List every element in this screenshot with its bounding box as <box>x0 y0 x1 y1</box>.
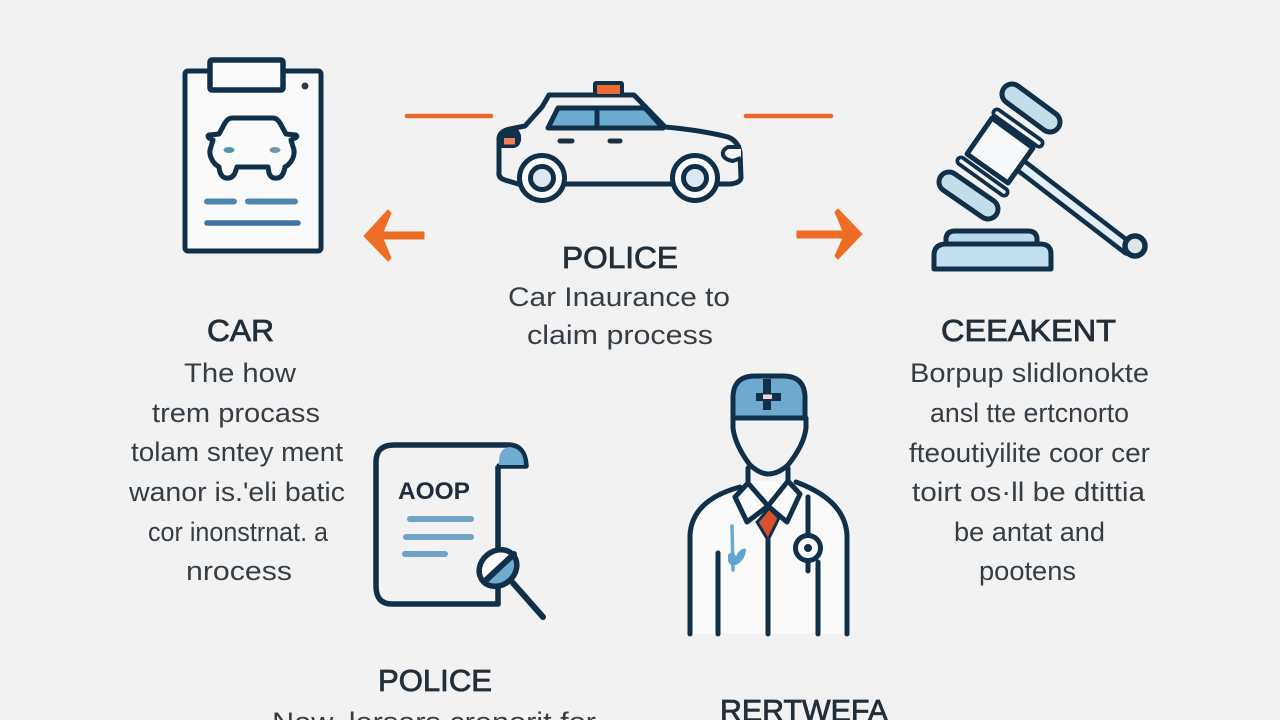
text block: ceeakent <box>909 358 1150 586</box>
text block: car: The how <box>184 358 297 388</box>
icon: police car <box>499 81 741 200</box>
face <box>733 418 806 474</box>
text block: car: wanor is.'eli batic <box>128 477 345 507</box>
text block: ceeakent: ansl tte ertcnorto <box>930 398 1129 428</box>
arrow: top-left dash <box>407 114 491 118</box>
barrel <box>967 118 1033 183</box>
magnifier <box>472 542 524 594</box>
heading: police bottom: POLICE <box>378 663 492 698</box>
collars <box>961 113 1039 192</box>
text block: police centre: claim process <box>527 320 713 350</box>
icon: doctor with stethoscope <box>690 376 847 634</box>
windows <box>548 108 663 128</box>
icon: clipboard with car <box>185 60 321 251</box>
text block: ceeakent: pootens <box>979 556 1076 586</box>
car body <box>499 95 741 184</box>
arrow: top-right dash <box>746 114 831 118</box>
arrow: pointing right <box>797 209 862 259</box>
document lines <box>405 519 471 554</box>
heading: police centre: POLICE <box>562 240 678 275</box>
text block: car: trem procass <box>152 398 320 428</box>
heading: ceeakent: CEEAKENT <box>941 313 1116 348</box>
rear wheel <box>520 156 564 200</box>
sound block <box>946 231 1037 244</box>
icon: judge gavel <box>934 94 1145 269</box>
collar <box>735 481 800 522</box>
top cap <box>1012 94 1050 122</box>
text block: car: cor inonstrnat. a <box>148 517 329 547</box>
stethoscope <box>806 497 810 571</box>
arrow: pointing left <box>364 210 424 261</box>
text block: police centre <box>508 282 730 350</box>
text block: car <box>128 358 345 586</box>
paper <box>376 445 526 604</box>
handle <box>1020 165 1128 248</box>
icon: document with magnifier <box>376 445 543 617</box>
tie <box>757 508 779 540</box>
roof light <box>593 81 624 95</box>
coat <box>690 481 847 634</box>
document text: AOOP <box>398 478 470 505</box>
text block: ceeakent: Borpup slidlonokte <box>910 358 1149 388</box>
coat lines <box>718 540 818 634</box>
bottom cap <box>949 182 988 209</box>
text block: ceeakent: toirt os·ll be dtittia <box>912 477 1146 507</box>
tail light <box>501 128 521 148</box>
text block: ceeakent: fteoutiyilite coor cer <box>909 438 1150 468</box>
cap <box>733 376 805 418</box>
text block: ceeakent: be antat and <box>954 517 1105 547</box>
curl <box>499 447 524 465</box>
pocket pen <box>732 526 733 570</box>
text block: car: tolam sntey ment <box>131 437 344 467</box>
text block: police centre: Car Inaurance to <box>508 282 730 312</box>
heading: car: CAR <box>207 313 274 348</box>
door handles <box>560 138 620 144</box>
front wheel <box>672 156 718 200</box>
head light <box>723 147 741 161</box>
text block: car: nrocess <box>186 556 292 586</box>
